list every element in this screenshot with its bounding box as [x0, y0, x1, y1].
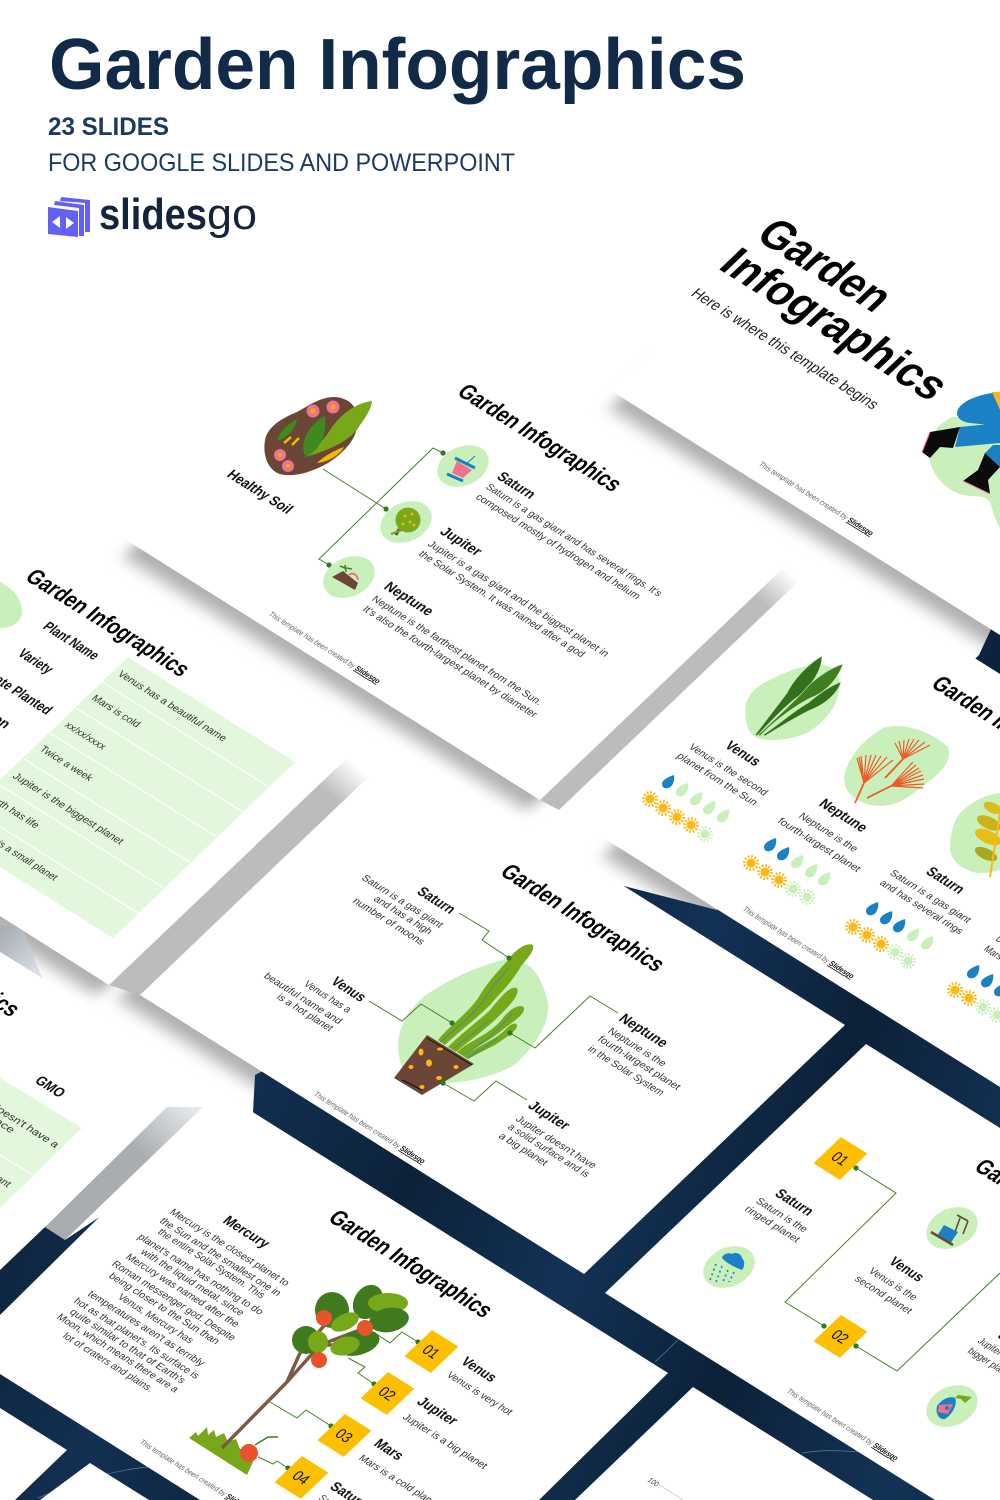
item: mars	[356, 1436, 442, 1500]
slide: care steps	[605, 1044, 1000, 1500]
credit: This template has been created by Slidesgo	[784, 1387, 901, 1463]
table row values: Jupiter is the biggest planet	[10, 771, 126, 847]
axis label: 100	[645, 1476, 662, 1488]
mercury text block: Mercury was named after the	[123, 1252, 242, 1330]
item: saturn text: Saturn is a gas giant	[887, 868, 974, 926]
item: neptune: Neptune	[381, 579, 438, 619]
item: venus	[444, 1354, 515, 1418]
credit: This template has been created by Slidesgo	[740, 905, 857, 981]
table row values: Mars is cold	[89, 693, 143, 730]
table row labels: Variety	[15, 646, 57, 677]
header: subtitle: FOR GOOGLE SLIDES AND POWERPOINT	[48, 149, 515, 177]
mercury text block: Venus, Mercury has	[115, 1292, 196, 1346]
icon: well	[916, 1199, 988, 1257]
icon: soil and sprout	[313, 548, 385, 606]
table background	[0, 657, 295, 938]
item: neptune: Neptune is the	[605, 1026, 669, 1069]
mercury text block: the Sun and the smallest one in	[157, 1216, 284, 1299]
icon: rain cloud	[693, 1238, 765, 1296]
tile 02	[813, 1315, 867, 1358]
column label: GMO: GMO	[32, 1073, 69, 1100]
item: jupiter: Jupiter is a gas giant and the biggest planet in	[425, 539, 611, 659]
item: venus: Venus has a	[301, 979, 354, 1016]
item: jupiter: Jupiter is a big planet	[400, 1412, 490, 1472]
chart gridline	[658, 1484, 683, 1500]
item: venus: is a hot planet	[274, 992, 336, 1034]
gap shadows and grey bands	[0, 358, 1000, 1240]
mercury text block: hot as that planet's. Its surface is	[71, 1296, 202, 1382]
item: jupiter	[400, 1394, 490, 1472]
item: saturn: Saturn	[494, 469, 539, 502]
illustration: apple tree	[189, 1279, 411, 1475]
item: saturn text: Saturn	[923, 864, 968, 897]
tile 03: 03	[331, 1426, 356, 1446]
table row labels	[0, 619, 103, 731]
cover title: Infographics	[710, 239, 960, 409]
tile 04: 04	[288, 1468, 313, 1488]
item: jupiter	[496, 1098, 599, 1180]
mercury text block: the entire Solar System. This	[155, 1227, 268, 1301]
slide: bottom centre-left (partial)	[40, 1463, 149, 1500]
item: jupiter: Jupiter doesn't have	[513, 1114, 599, 1171]
item: venus text: Venus	[722, 738, 765, 769]
mercury text block: Mercury	[220, 1213, 274, 1251]
item: saturn: Saturn	[414, 884, 459, 917]
item: mars: Mars	[371, 1436, 407, 1463]
tile 04	[274, 1456, 328, 1499]
item: venus: second planet	[852, 1274, 915, 1317]
item: jupiter: Jupiter	[414, 1394, 462, 1428]
tile 02	[360, 1372, 414, 1415]
slide: bottom left (partial)	[0, 1408, 67, 1500]
item: venus: beautiful name and	[261, 971, 345, 1027]
header: slide count: 23 SLIDES	[48, 113, 169, 141]
item: neptune: It's also the fourth-largest planet by diameter	[360, 604, 540, 720]
mercury text block: Mercury is the closest planet to	[167, 1207, 292, 1289]
icon: spray bottle	[916, 1377, 988, 1435]
slide: plant table	[0, 503, 370, 985]
item: jupiter: Jupiter	[525, 1098, 574, 1133]
tile 01	[813, 1137, 867, 1180]
item: venus: Venus	[328, 974, 370, 1004]
blob	[0, 582, 22, 628]
item: saturn	[350, 873, 459, 948]
logo: slidesgo: slidesgo	[99, 190, 257, 239]
slide: watering and sun	[559, 561, 1000, 1087]
item: saturn: ringed planet	[742, 1204, 803, 1245]
item: neptune: Neptune	[616, 1011, 672, 1050]
mercury text block: temperatures aren't as terribly	[85, 1289, 207, 1369]
slide: bottom chart (partial)	[575, 1387, 873, 1500]
item: saturn	[316, 1479, 396, 1500]
item: saturn: composed mostly of hydrogen and helium	[473, 492, 643, 602]
item: jupiter: a big planet	[496, 1131, 551, 1168]
navy background	[0, 600, 1000, 1500]
connector lines	[369, 913, 618, 1101]
slide: cover	[610, 141, 1000, 635]
item: neptune text: Neptune is the	[796, 811, 860, 855]
illustration: potted plant	[394, 944, 548, 1095]
item: neptune: fourth-largest planet	[595, 1034, 684, 1093]
item: venus: Venus is very hot	[444, 1370, 515, 1418]
item: saturn: Saturn	[772, 1186, 817, 1219]
connector lines	[319, 448, 446, 568]
item: saturn: Saturn is the	[753, 1196, 810, 1235]
table row values: Twice a week	[37, 744, 95, 784]
item: saturn	[742, 1186, 817, 1245]
venus water and sun ratings	[644, 775, 729, 840]
saturn water and sun ratings	[846, 902, 933, 968]
mercury text block: Roman messenger god. Despite	[109, 1259, 238, 1343]
slide: healthy soil	[96, 272, 801, 800]
illustration: soil patch	[264, 397, 372, 475]
slide title: Garden Infographics	[452, 379, 628, 496]
item: venus	[852, 1254, 928, 1317]
label: healthy soil: Healthy Soil	[224, 467, 297, 517]
item: jupiter: the Solar System. It was named after a god	[416, 549, 588, 660]
tile 01: 01	[827, 1149, 852, 1169]
table text	[0, 1081, 62, 1190]
slide title: Garden Infographics	[495, 859, 671, 976]
item: jupiter	[965, 1328, 1000, 1381]
slide title: Garden Infographics	[323, 1205, 499, 1322]
mercury text block: lot of craters and plains.	[60, 1331, 156, 1394]
credit: This template has been created by Slidesgo	[311, 1090, 428, 1166]
icon: drink cup	[427, 437, 499, 495]
item: venus: Venus is the	[866, 1266, 920, 1303]
item: neptune: in the Solar System	[585, 1044, 667, 1098]
item: jupiter: Jupiter	[437, 524, 486, 559]
item: saturn: and has a high	[371, 894, 435, 937]
mercury text block: being closer to the Sun than	[106, 1271, 222, 1347]
item: saturn: number of moons	[350, 896, 427, 948]
cover title: Garden	[747, 209, 904, 320]
item: neptune text	[775, 796, 872, 875]
credit: This template has been created by Slidesgo	[266, 610, 383, 686]
mercury text block: planet's name has nothing to do	[135, 1232, 266, 1317]
item: neptune: Neptune is the farthest planet from the Sun.	[369, 594, 545, 708]
item: neptune	[360, 579, 545, 720]
tile 01: 01	[418, 1342, 443, 1362]
cover credit: This template has been created by Slidesgo	[756, 460, 877, 538]
mercury text block	[54, 1207, 292, 1395]
table row values: xx/xx/xxxx	[62, 720, 109, 752]
tile 01	[404, 1330, 458, 1373]
mercury text block: Moon, which means there are a	[54, 1312, 182, 1395]
item: jupiter: a solid surface and is	[505, 1122, 592, 1180]
table row labels: Plant Name	[40, 619, 103, 663]
item: venus text	[674, 738, 770, 808]
header: title: Garden Infographics	[49, 25, 746, 105]
item: venus: Venus	[458, 1354, 501, 1385]
slide: GMO table (partial)	[0, 904, 198, 1265]
item: jupiter	[416, 524, 611, 660]
tile 02: 02	[827, 1327, 852, 1347]
item: venus: Venus	[886, 1254, 928, 1284]
item: neptune text: Neptune	[816, 796, 872, 835]
slide title: Garden Infographics	[20, 564, 196, 681]
item: saturn	[473, 469, 665, 602]
table row values	[0, 669, 229, 883]
item: venus text: planet from the Sun	[674, 751, 760, 808]
illustration: gardener legs	[922, 392, 1000, 528]
tile 03	[317, 1414, 371, 1457]
table row values: Venus has a beautiful name	[115, 669, 229, 744]
plant: green leaves	[745, 656, 843, 740]
connector lines	[785, 1165, 1000, 1371]
plant: yellow fern	[950, 793, 1000, 877]
cover subtitle: Here is where this template begins	[687, 286, 882, 413]
connector lines	[258, 1332, 421, 1471]
item: saturn: Saturn is a gas giant	[359, 873, 446, 931]
mercury text block: quite similar to that of Earth's	[67, 1307, 188, 1386]
item: neptune text: fourth-largest planet	[775, 816, 864, 875]
mercury text block: with the liquid metal, since	[137, 1246, 247, 1318]
slide: potted plant	[140, 746, 845, 1274]
item: neptune	[585, 1011, 684, 1098]
item: saturn text	[877, 864, 974, 937]
plant: orange flowers	[844, 726, 949, 806]
item: venus	[261, 971, 370, 1034]
icon: tree	[370, 493, 442, 551]
item: saturn text: and has several rings	[877, 878, 966, 937]
item: venus text: Venus is the second	[686, 742, 770, 798]
slide: tree	[0, 1094, 668, 1500]
mars water and sun ratings	[948, 965, 1000, 1022]
neptune water and sun ratings	[744, 838, 830, 904]
table background	[0, 1078, 82, 1208]
item: saturn: Saturn is a gas giant and has several rings. It's	[483, 482, 665, 599]
tile 02: 02	[374, 1384, 399, 1404]
